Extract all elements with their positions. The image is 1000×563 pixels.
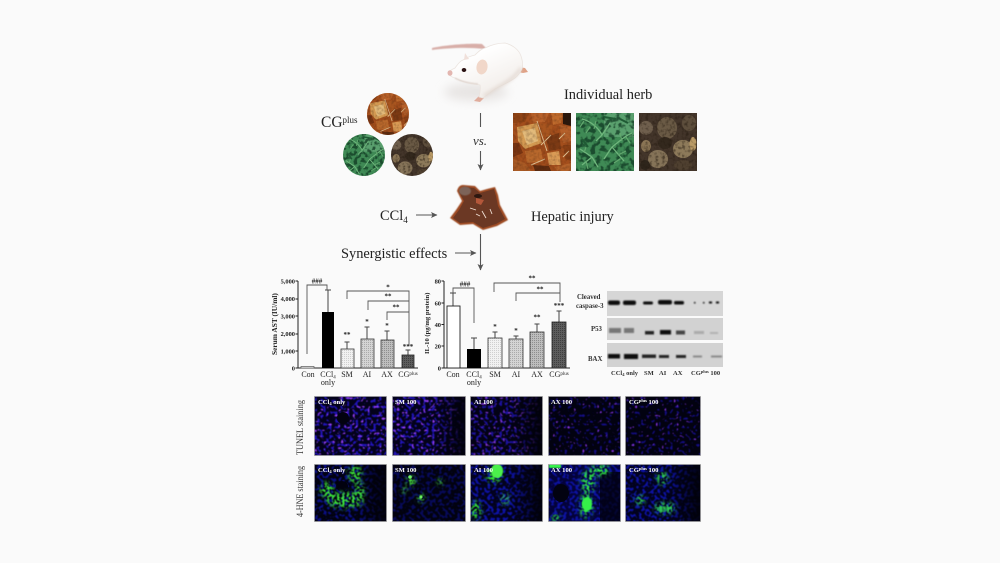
- blot lane labels: plus: [701, 369, 709, 374]
- bar chart: serum AST: 2,000: [281, 331, 295, 338]
- micrograph: TUNEL CCl4 only: [314, 396, 387, 456]
- bar chart: IL-10: ***: [554, 302, 565, 310]
- heading: Individual herb: Individual herb: [564, 87, 652, 103]
- micrograph: TUNEL CGplus 100: [625, 396, 701, 456]
- icon: white mouse: [432, 43, 528, 102]
- bar chart: IL-10: Con: [446, 370, 460, 379]
- bar chart: serum AST: 4,000: [281, 296, 295, 303]
- icon: CGplus herb circle 1: [367, 93, 410, 136]
- bar chart: serum AST: *: [386, 284, 390, 292]
- bar chart: serum AST: 4: [333, 376, 336, 380]
- arrow: mouse versus to liver: [473, 113, 487, 170]
- row label: 4-HNE staining: 4-HNE staining: [296, 466, 306, 517]
- bar chart: IL-10: AX: [531, 370, 543, 379]
- micrograph: 4-HNE AX 100: [548, 464, 621, 522]
- bar chart: serum AST: **: [344, 331, 351, 339]
- micrograph: TUNEL CCl4 only: CCl: [318, 399, 329, 406]
- micrograph: 4-HNE AI 100: AI 100: [474, 467, 494, 474]
- label: CCl4 with arrow: CCl: [380, 208, 403, 224]
- bar chart: IL-10: AI: [512, 370, 521, 379]
- bar chart: serum AST: [270, 278, 418, 387]
- micrograph: 4-HNE AX 100: AX 100: [551, 467, 573, 474]
- bar chart: serum AST: 0: [292, 366, 295, 372]
- bar chart: serum AST: AX: [381, 370, 393, 379]
- bar chart: serum AST: **: [392, 304, 400, 312]
- blot: cleaved caspase-3: Cleaved: [577, 294, 601, 301]
- bar chart: serum AST: only: [321, 378, 335, 387]
- blot: BAX: [588, 343, 723, 367]
- bar chart: IL-10: **: [528, 274, 536, 282]
- micrograph: TUNEL CCl4 only: only: [332, 399, 346, 406]
- bar chart: IL-10: [424, 274, 570, 387]
- blot lane labels: CG: [691, 370, 701, 377]
- bar chart: IL-10: 80: [435, 278, 441, 286]
- micrograph: 4-HNE SM 100: SM 100: [395, 467, 417, 474]
- micrograph: TUNEL AI 100: [470, 396, 543, 456]
- micrograph: 4-HNE CCl4 only: CCl: [318, 467, 329, 474]
- bar chart: IL-10: **: [536, 286, 544, 294]
- micrograph: 4-HNE CCl4 only: only: [332, 467, 346, 474]
- bar chart: IL-10: 0: [438, 366, 441, 372]
- label: CCl4 with arrow: 4: [403, 215, 408, 225]
- row label: TUNEL staining: TUNEL staining: [296, 400, 306, 455]
- micrograph: 4-HNE AI 100: [470, 464, 543, 522]
- bar chart: IL-10: CCl: [466, 370, 479, 379]
- bar chart: serum AST: CCl: [320, 370, 333, 379]
- blot: cleaved caspase-3: caspase-3: [576, 303, 604, 310]
- micrograph: 4-HNE CGplus 100: [625, 464, 701, 522]
- arrow: liver to results: [480, 234, 482, 270]
- bar chart: serum AST: Serum AST (IU/ml): [270, 293, 279, 355]
- bar chart: IL-10: 4: [479, 376, 482, 380]
- label: CGplus: plus: [343, 115, 358, 125]
- micrograph: TUNEL CGplus 100: plus: [639, 398, 647, 403]
- blot: P53: [591, 318, 723, 340]
- icon: liver: [450, 185, 508, 230]
- blot lane labels: SM: [644, 370, 654, 377]
- bar chart: IL-10: CG: [549, 370, 560, 379]
- label: CCl4 with arrow: [380, 208, 437, 225]
- micrograph: 4-HNE CCl4 only: [314, 464, 387, 522]
- arrow: mouse versus to liver: vs.: [473, 133, 487, 148]
- bar chart: IL-10: IL-10 (pg/mg protein): [424, 293, 431, 354]
- bar chart: serum AST: AI: [363, 370, 372, 379]
- blot: BAX: BAX: [588, 356, 602, 363]
- bar chart: serum AST: Con: [301, 370, 315, 379]
- label: Hepatic injury: Hepatic injury: [531, 209, 615, 225]
- micrograph: TUNEL AI 100: AI 100: [474, 399, 494, 406]
- micrograph: TUNEL AX 100: AX 100: [551, 399, 573, 406]
- micrograph: TUNEL CGplus 100: 100: [647, 399, 659, 406]
- photo: herb 1: [513, 113, 571, 171]
- micrograph: TUNEL CGplus 100: CG: [629, 399, 639, 406]
- bar chart: serum AST: **: [384, 292, 392, 300]
- bar chart: serum AST: plus: [409, 372, 418, 377]
- bar chart: IL-10: only: [467, 378, 481, 387]
- icon: CGplus herb circle 3: [391, 134, 434, 177]
- micrograph: 4-HNE CCl4 only: 4: [329, 469, 332, 474]
- micrograph: 4-HNE CGplus 100: plus: [639, 466, 647, 471]
- bar chart: serum AST: 3,000: [281, 314, 295, 320]
- bar chart: serum AST: CG: [398, 370, 409, 379]
- micrograph: 4-HNE CGplus 100: CG: [629, 467, 639, 474]
- blot lane labels: 100: [709, 370, 720, 377]
- icon: CGplus herb circle 2: [343, 134, 386, 177]
- bar chart: IL-10: plus: [560, 372, 569, 377]
- bar chart: serum AST: *: [385, 322, 389, 330]
- micrograph: TUNEL AX 100: [548, 396, 621, 456]
- bar chart: IL-10: SM: [489, 370, 501, 379]
- blot: P53: P53: [591, 326, 603, 333]
- micrograph: TUNEL SM 100: SM 100: [395, 399, 417, 406]
- micrograph: 4-HNE CGplus 100: 100: [647, 467, 659, 474]
- bar chart: IL-10: **: [534, 314, 541, 322]
- bar chart: IL-10: 20: [435, 344, 441, 350]
- photo: herb 2: [576, 113, 634, 171]
- bar chart: serum AST: ###: [312, 278, 323, 286]
- bar chart: IL-10: 40: [435, 322, 441, 329]
- western blot panel: [576, 291, 723, 377]
- bar chart: IL-10: *: [514, 327, 518, 335]
- bar chart: IL-10: *: [493, 323, 497, 331]
- label: Synergistic effects with arrow: Synergistic effects: [341, 246, 448, 262]
- label: CGplus: CG: [321, 114, 343, 131]
- blot lane labels: [611, 369, 720, 377]
- blot lane labels: AI: [659, 370, 667, 377]
- blot: cleaved caspase-3: [576, 291, 723, 316]
- blot lane labels: 4: [622, 372, 625, 377]
- photo: herb 3: [639, 113, 697, 171]
- blot lane labels: AX: [673, 370, 683, 377]
- bar chart: serum AST: 5,000: [281, 278, 295, 286]
- bar chart: serum AST: ***: [403, 343, 414, 351]
- blot lane labels: only: [624, 370, 639, 377]
- bar chart: IL-10: 60: [435, 300, 441, 308]
- micrograph: TUNEL SM 100: [392, 396, 466, 456]
- micrograph: TUNEL CCl4 only: 4: [329, 401, 332, 406]
- micrograph: 4-HNE SM 100: [392, 464, 466, 522]
- bar chart: serum AST: SM: [341, 370, 353, 379]
- blot lane labels: CCl: [611, 370, 622, 377]
- bar chart: serum AST: 1,000: [281, 348, 295, 356]
- bar chart: IL-10: ###: [460, 280, 471, 288]
- bar chart: serum AST: *: [365, 318, 369, 326]
